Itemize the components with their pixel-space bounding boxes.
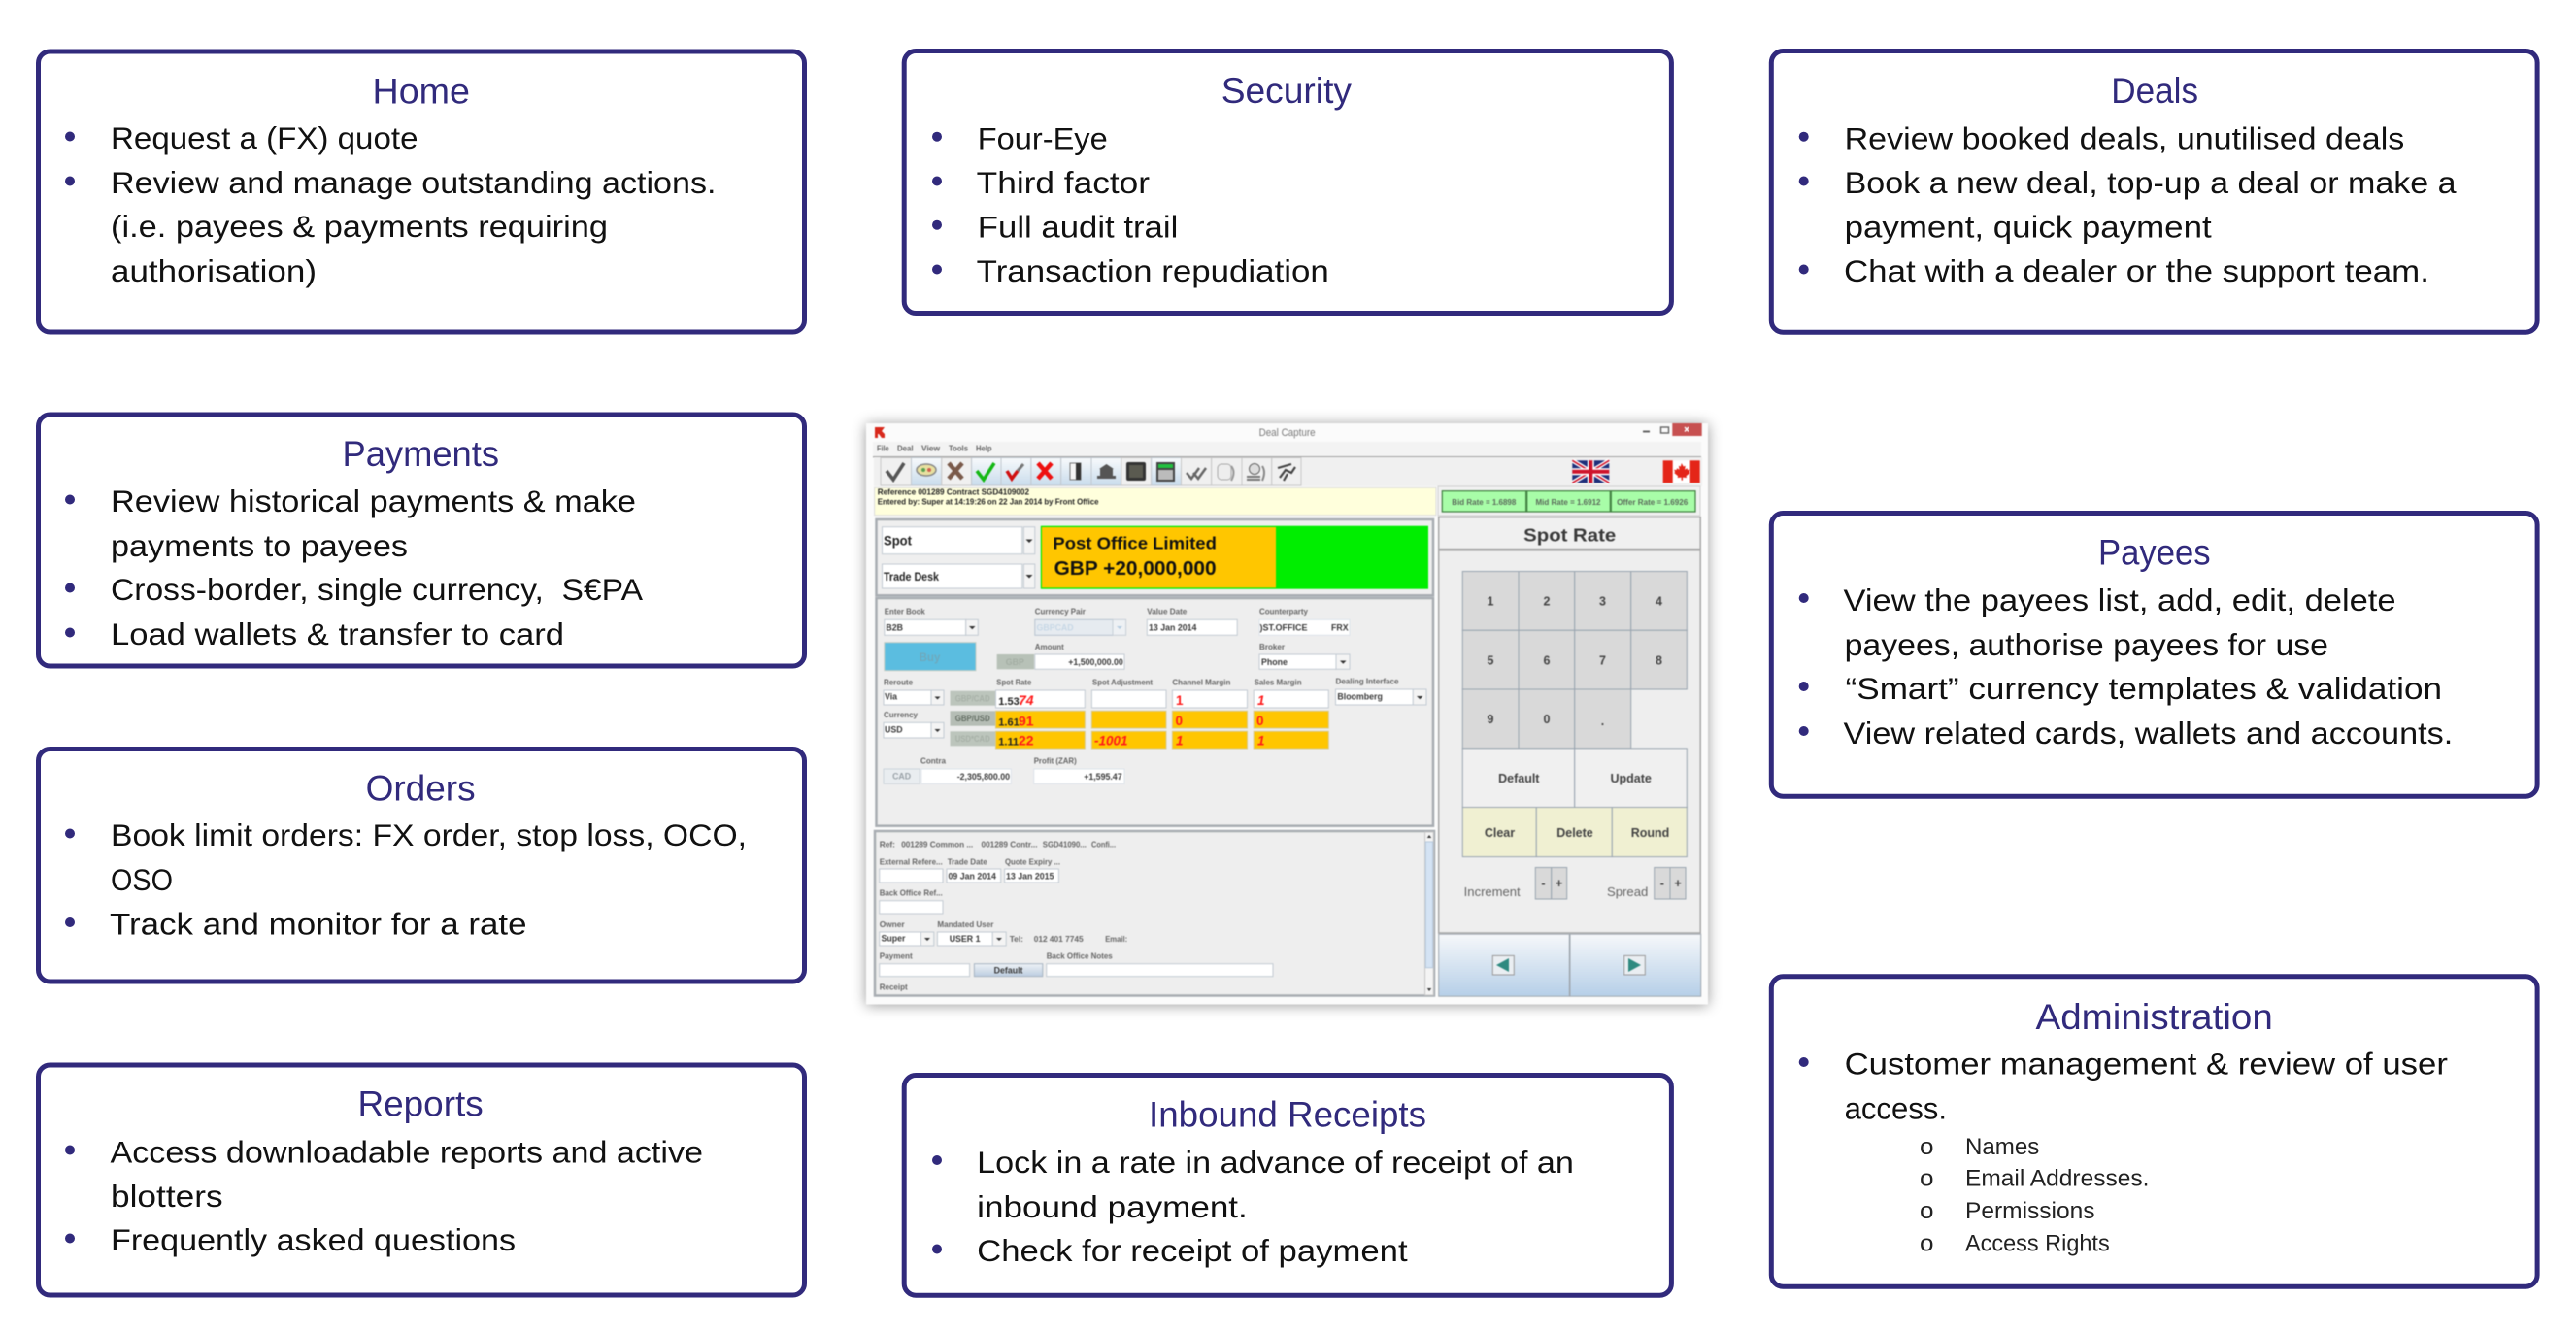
deal details panel: 13 Jan 2015 [1006,872,1054,882]
rates strip: Mid Rate = 1.6912 [1536,498,1601,507]
keypad: 4 [1656,594,1662,608]
rate grid: 1.53 [998,696,1020,708]
heading: Payees: Payees [2098,533,2211,573]
keypad: Delete [1556,826,1593,840]
panel: Payees [1771,513,2537,796]
buy button: Buy [920,652,941,664]
sub-list: access items: Names [1965,1134,2039,1160]
deal form panel: Currency [884,710,918,719]
rate grid: 74 [1019,692,1034,708]
panel: Orders [39,750,804,982]
bullet list: Inbound Receipts: inbound payment. [977,1189,1248,1224]
menu bar [873,442,1701,457]
heading: Home: Home [373,72,470,111]
rate grid: 1.61 [998,716,1020,728]
heading: Security: Security [1221,71,1353,111]
keypad: Update [1611,772,1652,785]
keypad: 2 [1544,594,1551,608]
bullet list: Reports: blotters [111,1179,223,1214]
deal type panel: Trade Desk [884,570,939,583]
keypad: Default [1498,772,1540,785]
window title bar [875,423,1702,439]
scrollbar [1425,832,1433,995]
buy button [885,643,976,671]
bullet list: Deals: Chat with a dealer or the support team. [1844,253,2429,288]
menu bar: File [877,444,889,453]
currency tags: USD*CAD [955,734,990,744]
increment and spread steppers: Spread [1607,885,1648,899]
rate grid: 1 [1257,734,1265,749]
bullet list: Home: Review and manage outstanding actions. [111,165,717,200]
keypad: 1 [1488,594,1494,608]
deal form panel: GBP [1006,657,1024,667]
deal form panel: Value Date [1147,607,1188,617]
rate grid: 91 [1019,713,1034,728]
bullet list: Payees: “Smart” currency templates & validation [1846,671,2442,706]
heading: Payments: Payments [342,434,499,474]
deal details panel: Tel: [1010,934,1023,944]
currency tags: GBP/USD [955,714,990,723]
rate grid: 1 [1176,734,1184,749]
menu bar: Deal [897,444,913,453]
keypad: 0 [1544,713,1551,726]
bullet list: Home: Request a (FX) quote [111,120,418,155]
bullet list: Payees: View related cards, wallets and accounts. [1843,716,2453,750]
deal details panel: Quote Expiry ... [1005,857,1060,867]
counterparty banner [1041,526,1428,589]
sub-list: access items: o [1920,1166,1934,1192]
keypad: 3 [1599,594,1606,608]
rate grid: 1 [1176,693,1184,708]
deal form panel: Dealing Interface [1336,677,1399,686]
deal details panel: 012 401 7745 [1034,934,1084,944]
panel: Home [39,51,804,332]
heading: Inbound Receipts: Inbound Receipts [1149,1095,1426,1135]
keypad: 5 [1488,654,1494,668]
deal form panel: Channel Margin [1172,677,1230,686]
rates strip: Bid Rate = 1.6898 [1452,498,1517,507]
bullet list: Payments: payments to payees [111,528,408,563]
rate grid: 1.11 [998,737,1019,749]
deal form panel: )ST.OFFICE [1260,622,1308,632]
deal form panel: Currency Pair [1035,607,1086,617]
deal details panel: 001289 Common ... [901,840,973,850]
bullet list: Home: (i.e. payees & payments requiring [111,209,608,244]
bullet list: Payees [1799,583,2453,750]
rate grid: 0 [1256,714,1264,728]
keypad: Round [1631,826,1669,840]
panel: Security [904,50,1671,313]
deal reference bar: Entered by: Super at 14:19:26 on 22 Jan 2014 by Front Office [878,496,1099,506]
bullet list: Reports [65,1134,703,1257]
bullet list: Reports: Access downloadable reports and active [111,1134,703,1169]
deal details panel: USER 1 [950,934,981,944]
bullet list: Deals: Review booked deals, unutilised deals [1845,120,2404,155]
bullet list: Payments: Review historical payments & make [111,483,636,518]
deal form panel: Amount [1035,642,1064,651]
keypad: 9 [1488,713,1494,726]
deal form panel: USD [885,725,903,735]
sub-list: access items: Email Addresses. [1965,1166,2150,1192]
rates strip: Offer Rate = 1.6926 [1617,498,1689,507]
panel: Reports [39,1065,804,1295]
deal details panel: SGD41090... [1043,840,1087,850]
heading: Reports: Reports [357,1083,484,1123]
rate grid: 22 [1019,733,1034,749]
deal details panel: Back Office Notes [1047,950,1113,960]
bullet list: Security: Transaction repudiation [977,253,1329,288]
menu bar: Tools [949,444,968,453]
heading: Administration: Administration [2035,997,2273,1037]
deal form panel: Phone [1261,657,1288,667]
deal details panel: Confi... [1091,840,1116,850]
spot rate panel [1439,517,1701,996]
deal details panel: Owner [880,919,905,929]
bullet list: Security [932,120,1329,288]
deal details panel: Super [882,933,906,943]
currency tags: GBP/CAD [955,693,990,703]
counterparty banner: Post Office Limited [1053,533,1217,552]
screenshot: Deal Capture window [866,423,1708,1004]
bullet list: Orders: Track and monitor for a rate [110,907,526,942]
counterparty banner: GBP +20,000,000 [1054,558,1217,580]
sub-list: access items: Access Rights [1965,1231,2110,1257]
panel: Inbound Receipts [904,1076,1671,1295]
sub-list: access items: o [1920,1134,1934,1160]
sub-list: access items [1920,1134,2150,1257]
heading: Deals: Deals [2111,71,2198,111]
bullet list: Administration: access. [1845,1091,1947,1126]
deal form panel: Spot Rate [996,677,1032,686]
deal form panel: Enter Book [885,607,925,617]
bullet list: Inbound Receipts: Lock in a rate in advance of receipt of an [977,1145,1574,1180]
bullet list: Orders [65,817,747,942]
deal form panel [876,598,1433,826]
deal form panel: FRX [1331,622,1349,632]
increment and spread steppers: + [1674,877,1682,890]
rates strip [1438,486,1700,516]
deal form panel: CAD [892,771,911,781]
bullet list: Security: Full audit trail [978,209,1178,244]
deal details panel: Ref: [880,840,895,850]
keypad: Clear [1485,826,1515,840]
deal reference bar: Reference 001289 Contract SGD4109002 [878,486,1029,496]
deal form panel: Profit (ZAR) [1034,756,1077,766]
bullet list: Orders: OSO [111,862,173,897]
deal form panel: Bloomberg [1337,691,1383,701]
bullet list: Orders: Book limit orders: FX order, stop loss, OCO, [111,817,747,852]
increment and spread steppers: - [1660,877,1664,890]
keypad [1462,571,1687,857]
sub-list: access items: o [1920,1231,1934,1257]
deal form panel: Reroute [884,677,913,686]
bullet list: Home [65,120,717,288]
deal form panel: B2B [886,622,903,632]
heading: Orders: Orders [366,769,476,809]
rate grid: -1001 [1094,734,1128,749]
deal form panel: GBPCAD [1037,622,1074,632]
menu bar: View [921,444,940,453]
deal type panel: Spot [884,533,912,548]
deal details panel: Default [994,965,1023,975]
deal form panel: Via [885,692,897,702]
deal details panel: Mandated User [937,919,994,929]
window title bar: Deal Capture [1259,427,1316,439]
toolbar icons [887,462,1295,482]
increment and spread steppers: - [1541,877,1546,890]
deal details panel: External Refere... [880,857,943,867]
deal form panel: Contra [920,756,946,766]
bullet list: Deals [1799,120,2457,288]
bullet list: Administration [1799,1047,2448,1257]
keypad: 7 [1599,654,1606,668]
deal details panel: 001289 Contr... [981,840,1037,850]
panel: Deals [1771,50,2537,332]
bullet list: Administration: Customer management & review of user [1845,1047,2448,1082]
deal form panel: Broker [1259,642,1286,651]
deal form panel: Spot Adjustment [1092,677,1153,686]
keypad: . [1601,715,1604,728]
deal details panel: Receipt [880,983,908,992]
bullet list: Security: Four-Eye [978,120,1108,155]
bullet list: Payments: Load wallets & transfer to card [111,617,564,651]
deal form panel: Counterparty [1259,607,1308,617]
bullet list: Deals: Book a new deal, top-up a deal or make a [1845,165,2457,200]
deal details panel: Trade Date [948,857,987,867]
increment and spread steppers: Increment [1464,885,1521,899]
deal reference bar [875,486,1436,516]
bullet list: Home: authorisation) [111,253,317,288]
deal details panel [875,831,1434,996]
increment and spread steppers [1464,868,1686,899]
bullet list: Payees: payees, authorise payees for use [1845,627,2328,662]
bullet list: Payments [65,483,643,651]
sub-list: access items: o [1920,1198,1934,1224]
rate grid [996,690,1328,749]
spot rate panel: Spot Rate [1523,526,1616,546]
increment and spread steppers: + [1556,877,1562,890]
bullet list: Security: Third factor [977,165,1150,200]
toolbar [874,457,1702,486]
menu bar: Help [976,444,992,453]
sub-list: access items: Permissions [1965,1198,2095,1224]
bullet list: Reports: Frequently asked questions [111,1222,516,1257]
deal form panel: 13 Jan 2014 [1149,622,1197,632]
bullet list: Inbound Receipts: Check for receipt of payment [977,1233,1408,1268]
deal form panel: Sales Margin [1255,677,1302,686]
deal type panel [876,519,1433,595]
icon: UK flag [1572,460,1609,483]
deal form panel: +1,500,000.00 [1068,657,1123,667]
panel: Administration [1771,977,2537,1286]
panel: Payments [39,415,804,666]
bullet list: Deals: payment, quick payment [1845,209,2212,244]
bullet list: Inbound Receipts [932,1145,1574,1268]
deal form panel: -2,305,800.00 [957,772,1010,782]
deal details panel: Email: [1105,934,1127,944]
deal details panel: Payment [880,950,913,960]
navigation buttons [1439,934,1701,996]
icon: Canada flag [1663,460,1700,483]
bullet list: Payees: View the payees list, add, edit, delete [1843,583,2396,617]
bullet list: Payments: Cross-border, single currency, S€PA [111,572,643,607]
rate grid: 0 [1175,714,1183,728]
deal form panel: +1,595.47 [1084,772,1122,782]
keypad: 8 [1656,654,1662,668]
deal details panel: 09 Jan 2014 [948,872,996,882]
deal details panel: Back Office Ref... [880,888,943,898]
rate grid: 1 [1257,693,1265,708]
currency tags [950,691,995,746]
keypad: 6 [1544,654,1551,668]
